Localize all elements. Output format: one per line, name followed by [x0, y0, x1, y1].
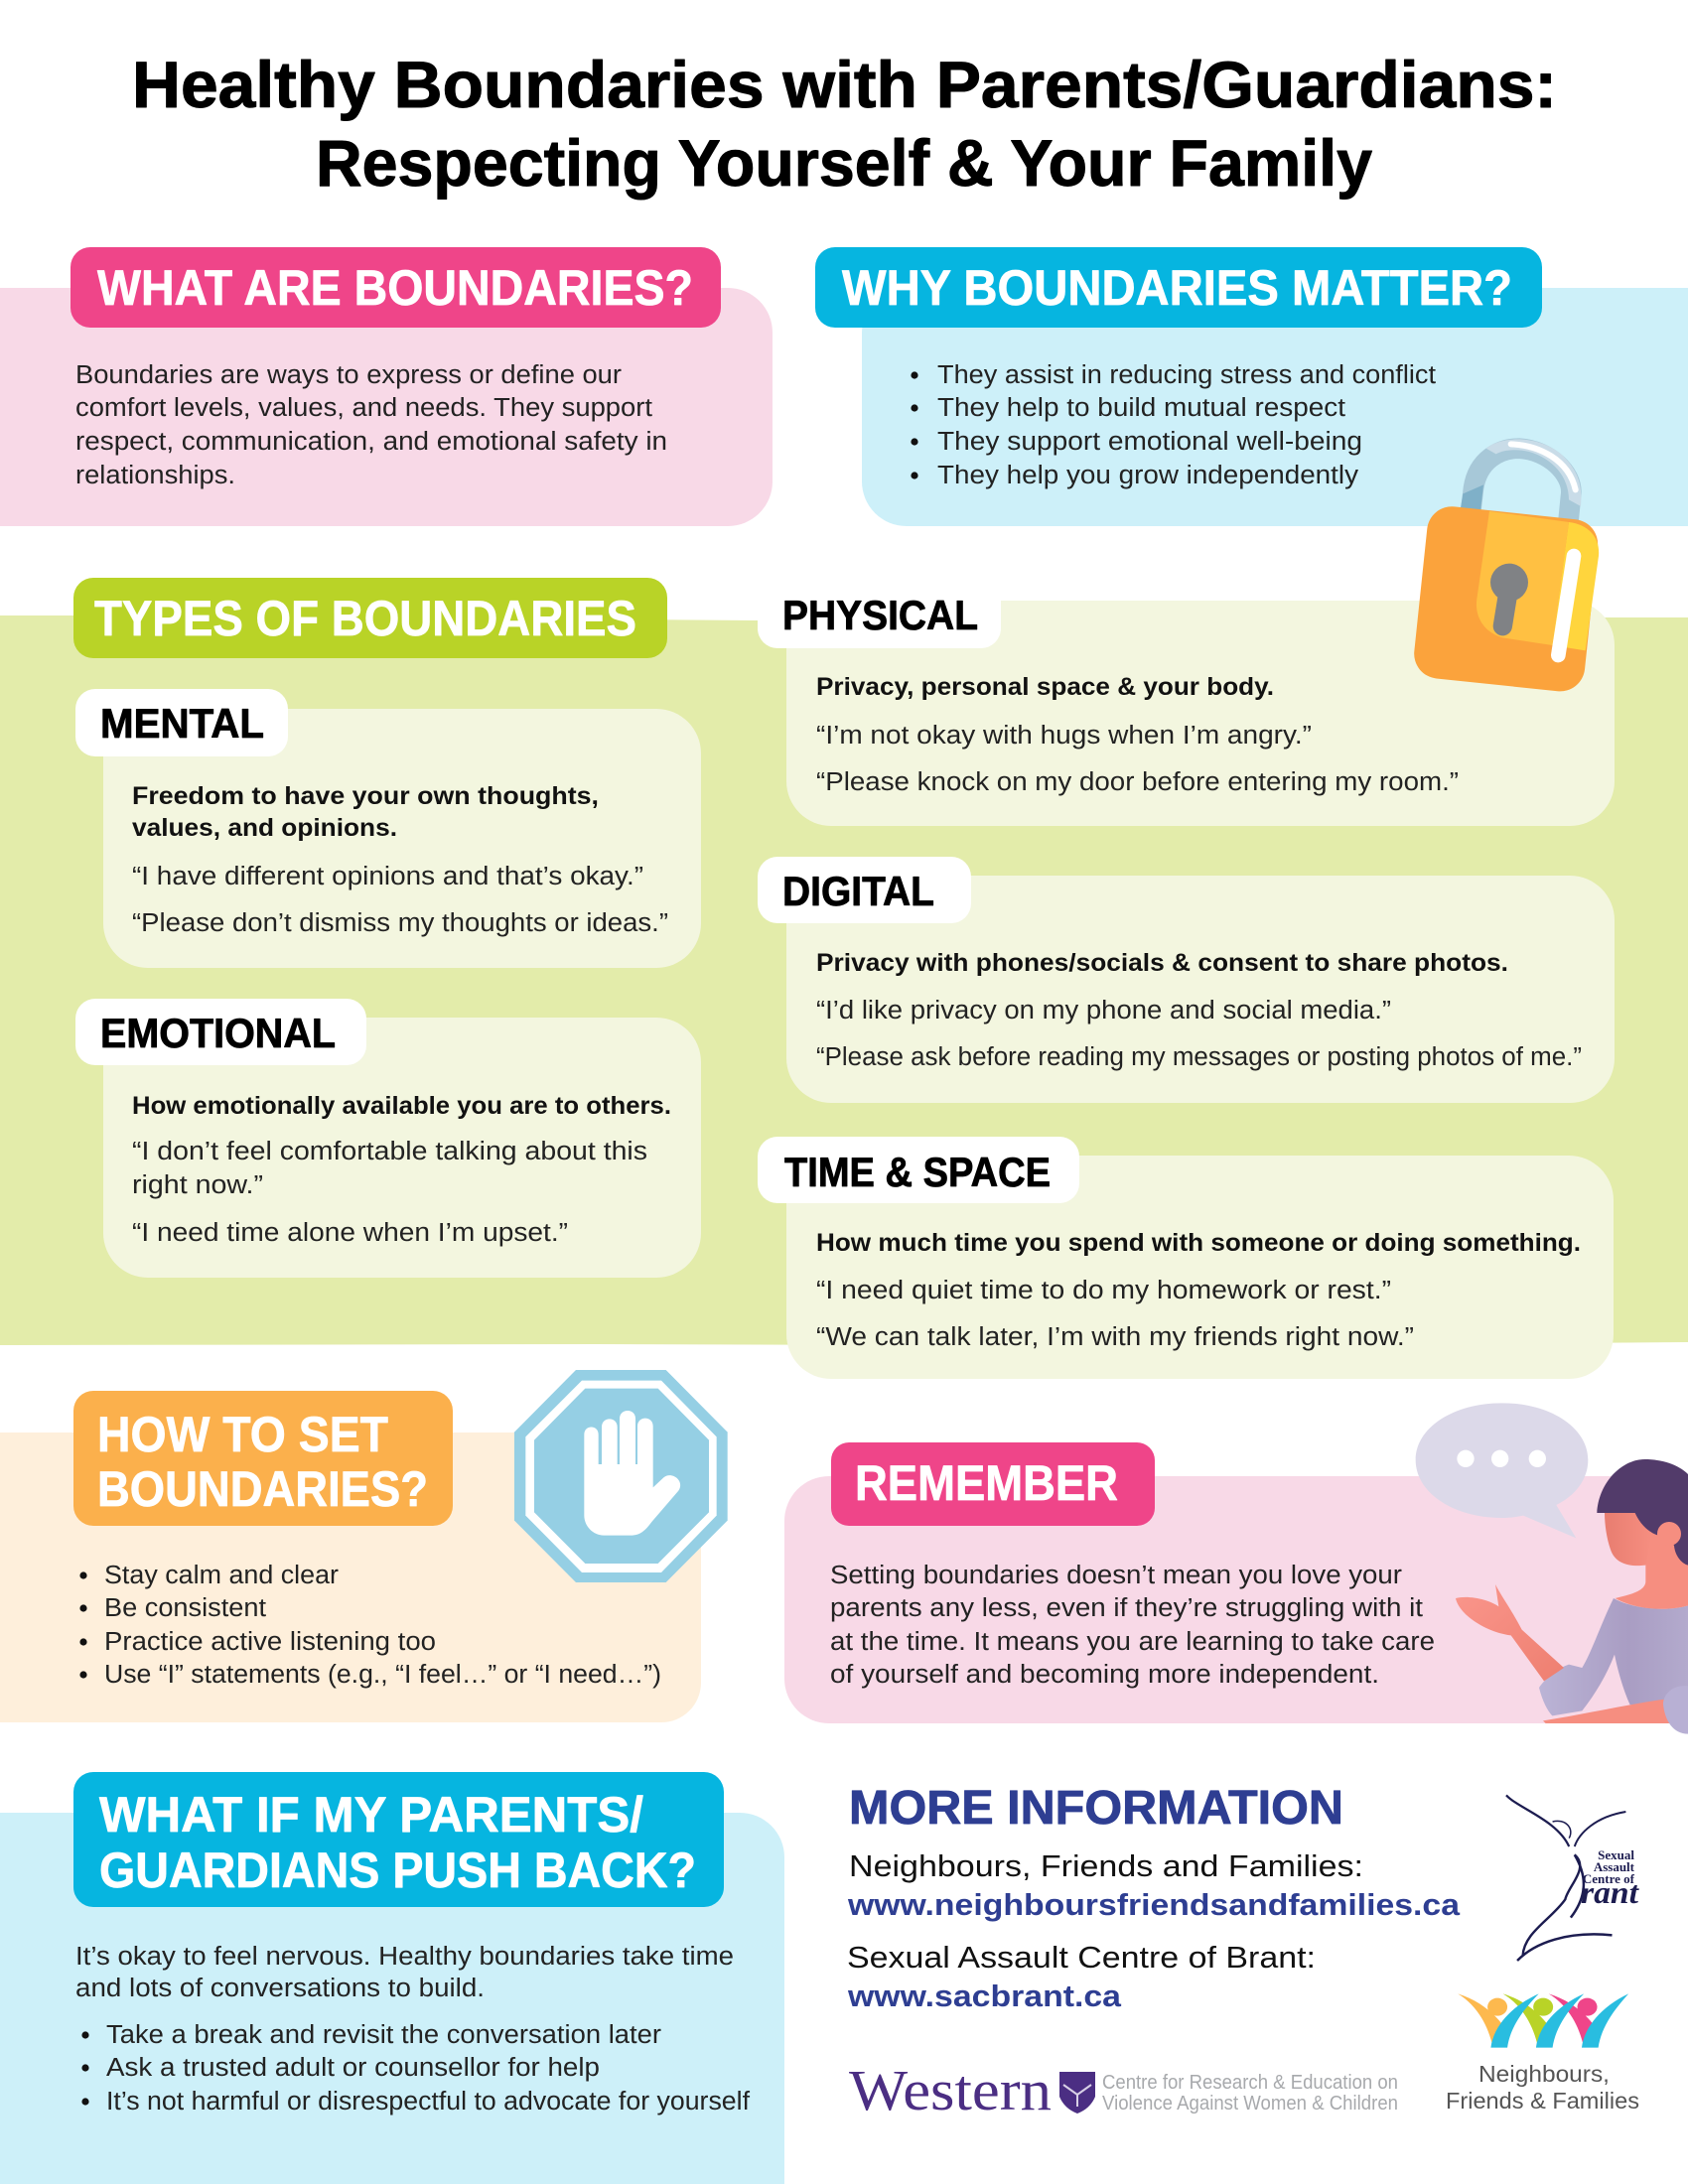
icon: stop sign with hand — [514, 1370, 728, 1582]
heading: types of boundaries: TYPES OF BOUNDARIES — [94, 591, 636, 646]
card: time and space: TIME & SPACE — [784, 1149, 1051, 1195]
card: emotional: “I need time alone when I’m upset.” — [132, 1219, 568, 1247]
list: how to set boundaries: Stay calm and clear — [104, 1562, 340, 1589]
list: how to set boundaries — [79, 1562, 661, 1689]
section: more information: Neighbours, Friends and Families: — [849, 1848, 1363, 1883]
card: digital: DIGITAL — [782, 868, 934, 914]
text: remember message: Setting boundaries doesn’t mean you love your — [830, 1562, 1403, 1589]
heading: types of boundaries — [73, 578, 667, 658]
card: emotional: EMOTIONAL — [100, 1010, 336, 1056]
card: mental: “I have different opinions and that’s okay.” — [132, 863, 643, 890]
title: Healthy Boundaries with Parents/Guardians: — [132, 48, 1557, 121]
card: physical: “I’m not okay with hugs when I’m angry.” — [816, 722, 1312, 750]
heading: how to set boundaries: HOW TO SET — [97, 1407, 388, 1462]
card: mental: MENTAL — [100, 700, 264, 747]
section: more information: www.sacbrant.ca — [847, 1979, 1122, 2013]
list: why boundaries matter — [911, 361, 1436, 489]
heading: remember: REMEMBER — [855, 1455, 1118, 1511]
list: how to set boundaries: Practice active listening too — [104, 1628, 436, 1656]
list: how to set boundaries: Use “I” statements (e.g., “I feel…” or “I need…”) — [104, 1661, 661, 1689]
heading: why boundaries matter — [815, 247, 1542, 328]
logo: Western Centre for Research and Education: Western — [849, 2058, 1052, 2122]
heading: what if parents push back: WHAT IF MY PARENTS/ — [99, 1787, 643, 1843]
card: digital: “Please ask before reading my messages or posting photos of me.” — [816, 1043, 1582, 1071]
list: push back tips — [81, 2021, 751, 2116]
logo: Sexual Assault Centre of Brant: rant — [1581, 1874, 1639, 1910]
text: boundaries definition: comfort levels, values, and needs. They support — [75, 394, 652, 422]
card: digital: “I’d like privacy on my phone and social media.” — [816, 997, 1391, 1024]
logo: Sexual Assault Centre of Brant: Centre of — [1583, 1871, 1635, 1886]
panel: how to set boundaries — [0, 1391, 701, 1722]
card: time and space: How much time you spend with someone or doing something. — [816, 1229, 1581, 1257]
logo: Neighbours, Friends and Families — [1446, 1993, 1639, 2114]
card: mental: Freedom to have your own thoughts, — [132, 782, 599, 810]
card: emotional: right now.” — [132, 1171, 263, 1199]
heading: how to set boundaries: BOUNDARIES? — [97, 1461, 428, 1517]
text: remember message: at the time. It means you are learning to take care — [830, 1628, 1435, 1656]
section: more information — [847, 1782, 1461, 2013]
heading: why boundaries matter: WHY BOUNDARIES MATTER? — [842, 260, 1512, 316]
text: boundaries definition: Boundaries are ways to express or define our — [75, 361, 623, 389]
logo: Neighbours, Friends and Families: Friends & Families — [1446, 2088, 1639, 2114]
text: remember message: of yourself and becoming more independent. — [830, 1661, 1379, 1689]
logo: Neighbours, Friends and Families: Neighbours, — [1478, 2061, 1610, 2087]
card: physical — [758, 581, 1615, 826]
text: remember message — [830, 1562, 1435, 1689]
list: push back tips: Take a break and revisit the conversation later — [106, 2021, 662, 2049]
panel: remember — [784, 1442, 1688, 1723]
text: push back intro — [75, 1943, 734, 2002]
panel: what if parents push back — [0, 1772, 784, 2184]
icon: padlock — [1412, 439, 1601, 694]
card: mental: “Please don’t dismiss my thoughts or ideas.” — [132, 909, 668, 937]
title — [132, 48, 1557, 200]
list: push back tips: It’s not harmful or disrespectful to advocate for yourself — [106, 2088, 751, 2116]
illustration: person with speech bubble — [1416, 1403, 1688, 1734]
card: time and space: “We can talk later, I’m with my friends right now.” — [816, 1323, 1414, 1351]
card: mental — [75, 689, 701, 968]
panel: what are boundaries — [0, 247, 773, 526]
card: digital: Privacy with phones/socials & consent to share photos. — [816, 949, 1508, 977]
card: emotional: How emotionally available you are to others. — [132, 1092, 671, 1120]
heading: remember — [831, 1442, 1155, 1526]
logo: Sexual Assault Centre of Brant: Sexual — [1598, 1847, 1634, 1862]
card: time and space: “I need quiet time to do my homework or rest.” — [816, 1277, 1391, 1304]
title: Respecting Yourself & Your Family — [316, 126, 1372, 200]
card: physical: PHYSICAL — [782, 592, 978, 638]
text: push back intro: It’s okay to feel nervous. Healthy boundaries take time — [75, 1943, 734, 1971]
heading: how to set boundaries — [73, 1391, 453, 1526]
logo: Sexual Assault Centre of Brant: Assault — [1594, 1859, 1635, 1874]
list: why boundaries matter: They support emotional well-being — [937, 428, 1362, 456]
heading: what are boundaries: WHAT ARE BOUNDARIES? — [97, 260, 693, 316]
card: physical: “Please knock on my door before entering my room.” — [816, 768, 1459, 796]
logo: Western Centre for Research and Education: Centre for Research & Education on — [1102, 2072, 1398, 2094]
panel: types of boundaries band — [0, 578, 1688, 1379]
list: why boundaries matter: They help to build mutual respect — [937, 394, 1345, 422]
card: mental: values, and opinions. — [132, 814, 397, 842]
list: how to set boundaries: Be consistent — [104, 1594, 266, 1622]
list: why boundaries matter: They assist in reducing stress and conflict — [937, 361, 1436, 389]
text: push back intro: and lots of conversations to build. — [75, 1975, 485, 2002]
list: why boundaries matter: They help you grow independently — [937, 462, 1358, 489]
card: digital — [758, 857, 1615, 1103]
list: push back tips: Ask a trusted adult or counsellor for help — [106, 2054, 600, 2082]
text: remember message: parents any less, even if they’re struggling with it — [830, 1594, 1423, 1622]
heading: what if parents push back — [73, 1772, 724, 1907]
logo: Sexual Assault Centre of Brant — [1506, 1795, 1639, 1961]
card: physical: Privacy, personal space & your body. — [816, 673, 1274, 701]
panel: why boundaries matter — [815, 247, 1688, 526]
text: boundaries definition: relationships. — [75, 462, 235, 489]
card: time and space — [758, 1137, 1614, 1379]
section: more information: Sexual Assault Centre of Brant: — [847, 1940, 1316, 1975]
heading: what if parents push back: GUARDIANS PUSH BACK? — [99, 1843, 696, 1898]
heading: what are boundaries — [70, 247, 721, 328]
section: more information: MORE INFORMATION — [849, 1782, 1343, 1835]
card: emotional — [75, 999, 701, 1278]
logo: Western Centre for Research and Education: Violence Against Women & Children — [1102, 2093, 1398, 2115]
logo: Western Centre for Research and Education — [849, 2058, 1398, 2122]
section: more information: www.neighboursfriendsandfamilies.ca — [847, 1887, 1461, 1922]
text: boundaries definition: respect, communication, and emotional safety in — [75, 428, 667, 456]
card: emotional: “I don’t feel comfortable talking about this — [132, 1138, 647, 1165]
text: boundaries definition — [75, 361, 667, 489]
